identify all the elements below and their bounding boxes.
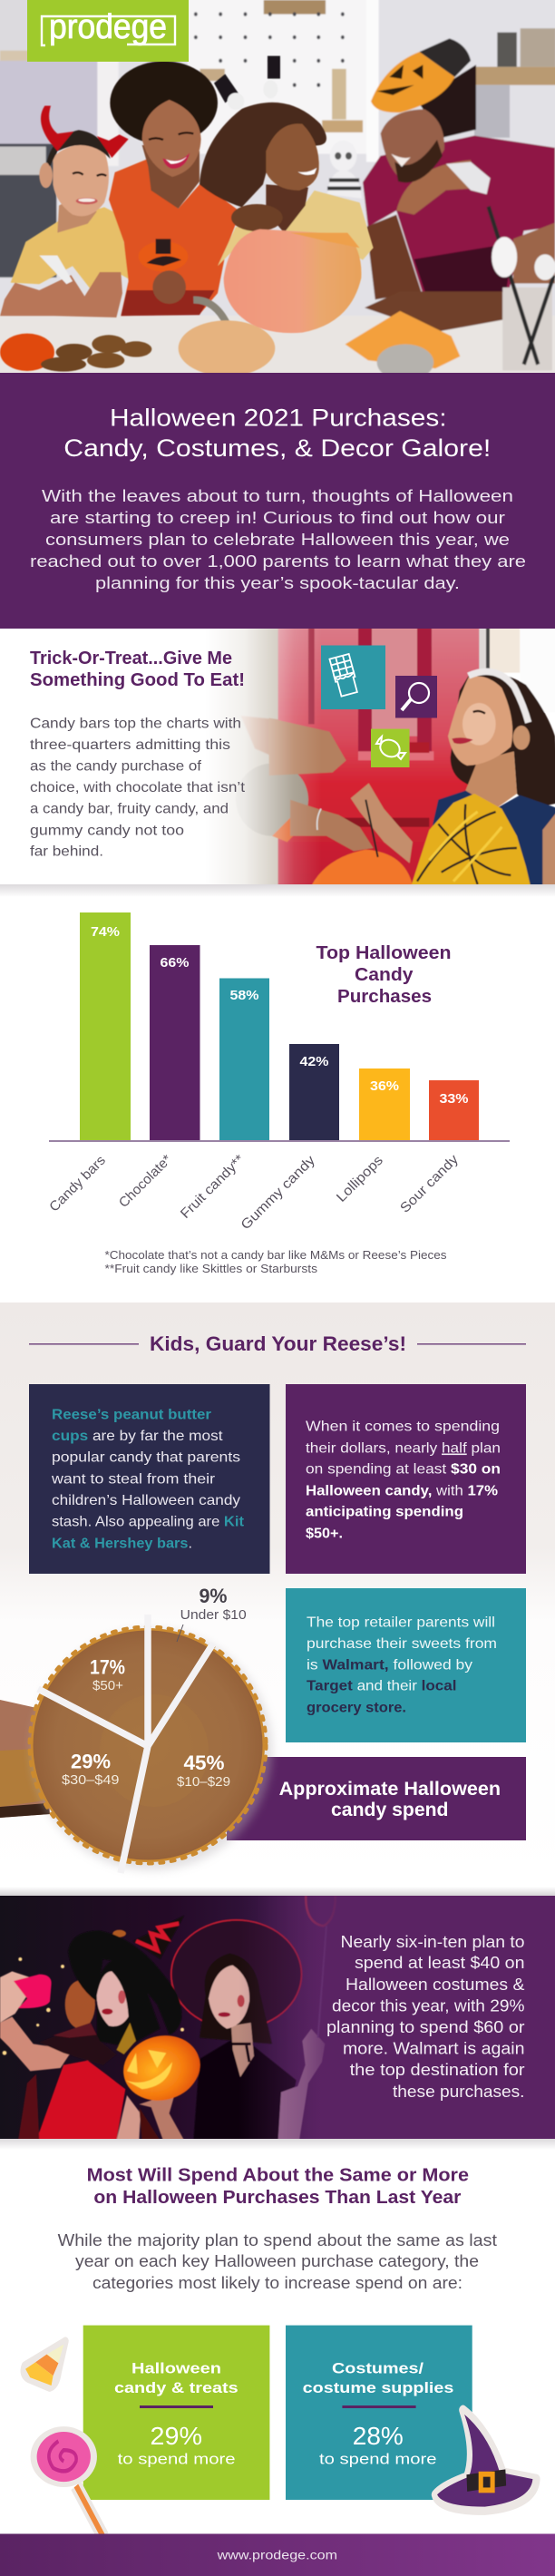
- paragraph: as the candy purchase of: [30, 758, 202, 775]
- pumpkin lid and skull: [346, 311, 460, 368]
- paragraph: three-quarters admitting this: [30, 737, 230, 753]
- paragraph: spend categories: [58, 2231, 497, 2292]
- room background and father: [0, 0, 555, 385]
- paragraph: costumes and decor spend: more. Walmart is again: [343, 2040, 524, 2058]
- bar: fruit candy: [219, 978, 269, 1141]
- chart title: Purchases: [337, 987, 432, 1007]
- father shirt: [363, 136, 555, 299]
- second witch hat: [171, 1920, 302, 2029]
- intro paragraph: consumers plan to celebrate Halloween this year, we: [45, 530, 510, 549]
- pumpkin bucket: [311, 850, 413, 886]
- callout: navy box about Reese's: children’s Halloween candy: [52, 1493, 240, 1508]
- card: costumes and costume supplies: to spend more: [319, 2450, 437, 2467]
- paragraph: costumes and decor spend: decor this year, with 29%: [332, 1997, 524, 2015]
- callout: navy box about Reese's: popular candy that parents: [52, 1449, 240, 1466]
- girl face: [513, 726, 530, 750]
- glass with straws: [502, 288, 552, 370]
- callout: teal box about retailers: is Walmart, followed by: [307, 1658, 472, 1673]
- intro paragraph: With the leaves about to turn, thoughts of Halloween: [42, 486, 513, 505]
- adult fist and forearm: [269, 718, 346, 776]
- pegboard holes: [194, 12, 345, 87]
- father arms: [366, 215, 421, 299]
- footer: www.prodege.com: [216, 2547, 337, 2561]
- label: 9 percent under 10 dollars: 9%: [200, 1585, 227, 1607]
- girl neck and face: [266, 184, 308, 233]
- label: 9 percent under 10 dollars: [177, 1585, 247, 1642]
- bar: candy bars: [80, 912, 131, 1141]
- paragraph: choice, with chocolate that isn’t: [30, 780, 246, 795]
- bar: chocolate: [150, 945, 200, 1141]
- bar: lollipops: [359, 1068, 410, 1141]
- second witch dress: [193, 2041, 297, 2141]
- callout: navy box about Reese's: Kat & Hershey bars.: [52, 1537, 192, 1551]
- paragraph: costumes and decor spend: spend at least $40 on: [355, 1954, 524, 1972]
- skeleton prop: [446, 162, 491, 194]
- pie chart: peanut butter cup showing candy spend: $30–$49: [62, 1773, 120, 1788]
- callout: purple box about spending: $50+.: [306, 1526, 343, 1542]
- bar: candy bars: 74%: [91, 925, 120, 940]
- first witch hand: [0, 1971, 30, 2023]
- chart title: [316, 943, 452, 1007]
- card: costumes and costume supplies: Costumes/: [332, 2360, 424, 2377]
- callout: purple box about spending: [286, 1384, 526, 1574]
- chart title: Candy: [355, 965, 414, 985]
- mother lollipop and hand: [139, 241, 188, 271]
- first witch arm: [0, 2016, 73, 2071]
- door mouldings: [308, 615, 315, 724]
- paragraph: gummy candy not too: [30, 824, 184, 838]
- callout: navy box about Reese's: [29, 1384, 270, 1574]
- boy head: [39, 162, 53, 188]
- leaf: [116, 2023, 136, 2054]
- callout: teal box about retailers: Target and their local: [307, 1678, 457, 1694]
- headband: [469, 671, 529, 723]
- chart footnotes: **Fruit candy like Skittles or Starbursts: [105, 1263, 317, 1275]
- pie chart: peanut butter cup showing candy spend: $10–$29: [177, 1775, 230, 1790]
- icon: wrapped candy: [371, 729, 410, 767]
- card: costumes and costume supplies: [286, 2326, 472, 2500]
- second witch neck: [231, 2023, 254, 2077]
- mother hair: [110, 61, 218, 144]
- paragraph: costumes and decor spend: Halloween costumes &: [346, 1976, 524, 1994]
- pie chart: peanut butter cup showing candy spend: [0, 1585, 272, 1873]
- callout: purple box about spending: When it comes to spending: [306, 1419, 500, 1435]
- callout: purple box about spending: Halloween candy, with 17%: [306, 1484, 498, 1498]
- chart footnotes: *Chocolate that’s not a candy bar like M&Ms or Reese’s Pieces: [105, 1249, 446, 1262]
- heading: most will spend about the same or more: Most Will Spend About the Same or More: [87, 2166, 469, 2186]
- panel: intro: [0, 373, 555, 629]
- paragraph: costumes and decor spend: these purchases.: [393, 2083, 524, 2101]
- card: Halloween candy and treats: to spend more: [118, 2450, 236, 2467]
- first witch face: [97, 1971, 129, 2026]
- icon: candy corn sticker: [24, 2341, 65, 2387]
- adult lower arm: [290, 800, 374, 851]
- slice labels: 29%: [71, 1751, 111, 1772]
- pumpkin mask: [371, 52, 455, 112]
- panel text: trick or treat: [30, 648, 246, 860]
- bowl: [236, 764, 308, 836]
- callout: navy box about Reese's: cups are by far the most: [52, 1429, 223, 1444]
- axis labels: Candy bars: [46, 1153, 109, 1215]
- heading: Trick-Or-Treat...Give Me: [30, 648, 232, 668]
- girl shirt: [218, 190, 374, 266]
- callout: teal box about retailers: grocery store.: [307, 1700, 406, 1716]
- girl arm: [351, 783, 413, 864]
- arm and sleeve by pumpkin: [116, 2095, 141, 2141]
- callout: purple box about spending: on spending at least $30 on: [306, 1462, 501, 1477]
- paragraph: far behind.: [30, 844, 103, 860]
- skeleton decoration on wall: [330, 154, 357, 171]
- paragraph: costumes and decor spend: Nearly six-in-ten plan to: [341, 1933, 524, 1951]
- mother shirt: [109, 159, 240, 316]
- icon: witch hat sticker: [435, 2410, 536, 2511]
- table items: [193, 300, 227, 324]
- card: Halloween candy and treats: 29%: [151, 2422, 202, 2450]
- logo: prodege: [49, 8, 167, 46]
- bar: sour candy: 33%: [439, 1092, 469, 1107]
- paragraph: spend categories: year on each key Halloween purchase category, the: [75, 2252, 479, 2270]
- father face: [418, 64, 476, 138]
- callout: purple box about spending: anticipating spending: [306, 1504, 463, 1520]
- footer: [0, 2534, 555, 2576]
- axis labels: [46, 1151, 462, 1233]
- second witch hair: [200, 1953, 272, 2044]
- section heading: Kids, Guard Your Reese’s!: [150, 1332, 406, 1355]
- intro paragraph: [30, 486, 526, 592]
- axis labels: Gummy candy: [238, 1152, 318, 1233]
- axis labels: Sour candy: [397, 1151, 462, 1216]
- slice labels: 45%: [183, 1751, 225, 1774]
- axis labels: Fruit candy**: [178, 1152, 248, 1222]
- title: [63, 405, 491, 462]
- first witch dress: [36, 2061, 125, 2141]
- label: approximate Halloween candy spend: [227, 1757, 526, 1840]
- heading: Something Good To Eat!: [30, 669, 245, 690]
- card: Halloween candy and treats: [83, 2326, 269, 2500]
- pom pom: [411, 794, 531, 886]
- horns: [41, 106, 73, 151]
- background glow: [65, 1980, 95, 2029]
- boy shirt: [11, 207, 130, 293]
- label: approximate Halloween candy spend: candy spend: [331, 1800, 448, 1820]
- paragraph: costumes and decor spend: [326, 1933, 525, 2101]
- girl neck: [465, 751, 517, 809]
- boy arms: [0, 272, 122, 317]
- paragraph: [30, 717, 246, 860]
- dress: [433, 791, 555, 886]
- string lights: [3, 1957, 184, 2055]
- card: costumes and costume supplies: costume supplies: [303, 2379, 453, 2396]
- bar: sour candy: [429, 1080, 479, 1141]
- big pumpkin: [224, 229, 361, 333]
- axis labels: Lollipops: [334, 1153, 386, 1205]
- adult arm: [241, 717, 278, 755]
- chart title: Top Halloween: [316, 943, 452, 963]
- card: Halloween candy and treats: candy & treats: [114, 2379, 239, 2396]
- intro paragraph: planning for this year’s spook-tacular day.: [95, 573, 460, 592]
- intro paragraph: reached out to over 1,000 parents to learn what they are: [30, 551, 526, 571]
- second witch hand and trident: [278, 2029, 325, 2141]
- title: Candy, Costumes, & Decor Galore!: [63, 434, 491, 462]
- callout: teal box about retailers: The top retailer parents will: [307, 1615, 495, 1631]
- family left side: [0, 56, 374, 376]
- paragraph: a candy bar, fruity candy, and: [30, 802, 229, 816]
- bar: fruit candy: 58%: [230, 989, 259, 1003]
- callout: teal box about retailers: purchase their sweets from: [307, 1636, 497, 1652]
- bar chart: top Halloween candy purchases: [46, 912, 510, 1233]
- heading: [30, 648, 245, 690]
- photo: girl trick-or-treating: [223, 629, 555, 884]
- pie chart: peanut butter cup showing candy spend: $50+: [92, 1679, 123, 1693]
- slice dividers: [38, 1615, 213, 1873]
- cape: [39, 2023, 116, 2065]
- title: Halloween 2021 Purchases:: [110, 405, 447, 432]
- bar: lollipops: 36%: [370, 1079, 399, 1094]
- axis labels: Chocolate*: [116, 1152, 175, 1211]
- jack-o-lantern: [116, 2027, 208, 2109]
- bar: chocolate: 66%: [160, 956, 190, 971]
- callout: navy box about Reese's: want to steal from their: [51, 1471, 216, 1488]
- logo: [27, 0, 189, 62]
- heading: most will spend about the same or more: on Halloween Purchases Than Last Year: [93, 2188, 462, 2208]
- girl hair: [200, 102, 326, 207]
- callout: purple box about spending: their dollars, nearly half plan: [306, 1440, 501, 1457]
- cut cup behind: [0, 1700, 50, 1818]
- paragraph: costumes and decor spend: planning to spend $60 or: [326, 2018, 524, 2036]
- callout: navy box about Reese's: Reese’s peanut butter: [52, 1408, 211, 1422]
- paragraph: costumes and decor spend: the top destination for: [350, 2061, 525, 2079]
- phone: [14, 1975, 52, 2008]
- girl hand: [231, 204, 283, 231]
- photo: witches taking a selfie: [0, 1896, 555, 2141]
- paragraph: Candy bars top the charts with: [30, 717, 241, 731]
- card: costumes and costume supplies: 28%: [353, 2422, 404, 2450]
- first witch hat: [68, 1930, 181, 2034]
- bar: gummy candy: [289, 1044, 339, 1141]
- callout: navy box about Reese's: stash. Also appealing are Kit: [52, 1515, 245, 1529]
- paragraph: spend categories: categories most likely to increase spend on are:: [92, 2274, 462, 2292]
- intro paragraph: are starting to creep in! Curious to find out how our: [50, 508, 505, 527]
- slice labels: [71, 1655, 225, 1774]
- second witch face: [209, 1966, 249, 2029]
- icon: lollipop sticker: [31, 2426, 103, 2537]
- slice labels: 17%: [90, 1655, 125, 1678]
- callout: teal box about retailers: [286, 1588, 526, 1742]
- icon: lollipop magnifier: [395, 676, 437, 718]
- heading: most will spend about the same or more: [87, 2166, 469, 2208]
- hero photo: family carving pumpkins: [0, 0, 555, 385]
- skull props: [214, 74, 239, 102]
- bar: gummy candy: 42%: [299, 1055, 329, 1069]
- table: [0, 316, 555, 381]
- panel: Kids, Guard Your Reese's: [0, 1303, 555, 1883]
- label: 9 percent under 10 dollars: Under $10: [180, 1608, 247, 1623]
- mother neck and face: [142, 145, 200, 209]
- first witch hair: [97, 1957, 161, 2047]
- icon: chocolate bar: [321, 646, 385, 709]
- label: approximate Halloween candy spend: Approximate Halloween: [279, 1779, 501, 1800]
- card: Halloween candy and treats: Halloween: [131, 2360, 221, 2377]
- paragraph: spend categories: While the majority plan to spend about the same as last: [58, 2231, 497, 2249]
- chart footnotes: [105, 1249, 446, 1275]
- girl hair: [451, 673, 555, 809]
